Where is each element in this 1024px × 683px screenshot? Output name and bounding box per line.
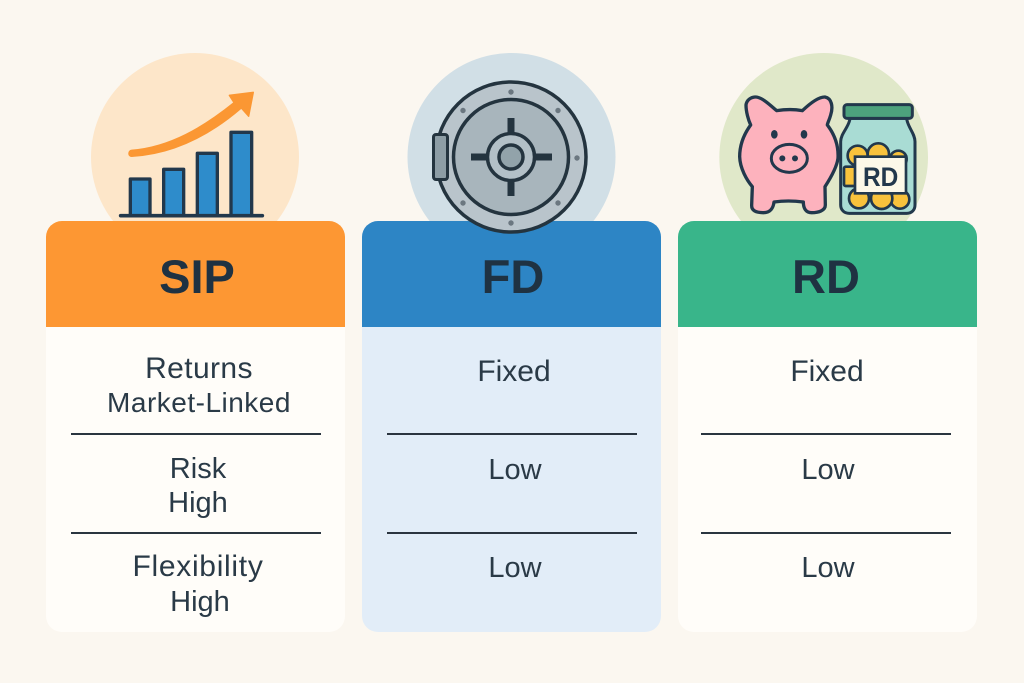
text: risk value: Low	[488, 454, 542, 486]
text: returns value: Fixed	[790, 355, 864, 388]
heading: SIP: SIP	[159, 250, 235, 303]
heading: SIP	[46, 221, 345, 327]
text: flexibility: Flexibility	[132, 550, 264, 583]
heading: RD: RD	[792, 250, 860, 303]
heading: FD: FD	[482, 250, 544, 303]
text: returns: Returns	[145, 352, 253, 385]
panel: SIP	[46, 221, 345, 632]
text: market-linked: Market-Linked	[107, 387, 291, 418]
text: risk: Risk	[170, 453, 226, 485]
heading: FD	[362, 221, 661, 327]
text: returns value: Fixed	[477, 355, 551, 388]
icon label: RD: RD	[863, 162, 898, 192]
text: flexibility value: Low	[801, 552, 855, 584]
text: risk value: High	[168, 487, 228, 519]
text: risk value: Low	[801, 454, 855, 486]
panel: FD	[362, 221, 661, 632]
panel: RD	[678, 221, 977, 632]
text: flexibility value: Low	[488, 552, 542, 584]
heading: RD	[678, 221, 977, 327]
text: flexibility value: High	[170, 586, 230, 618]
